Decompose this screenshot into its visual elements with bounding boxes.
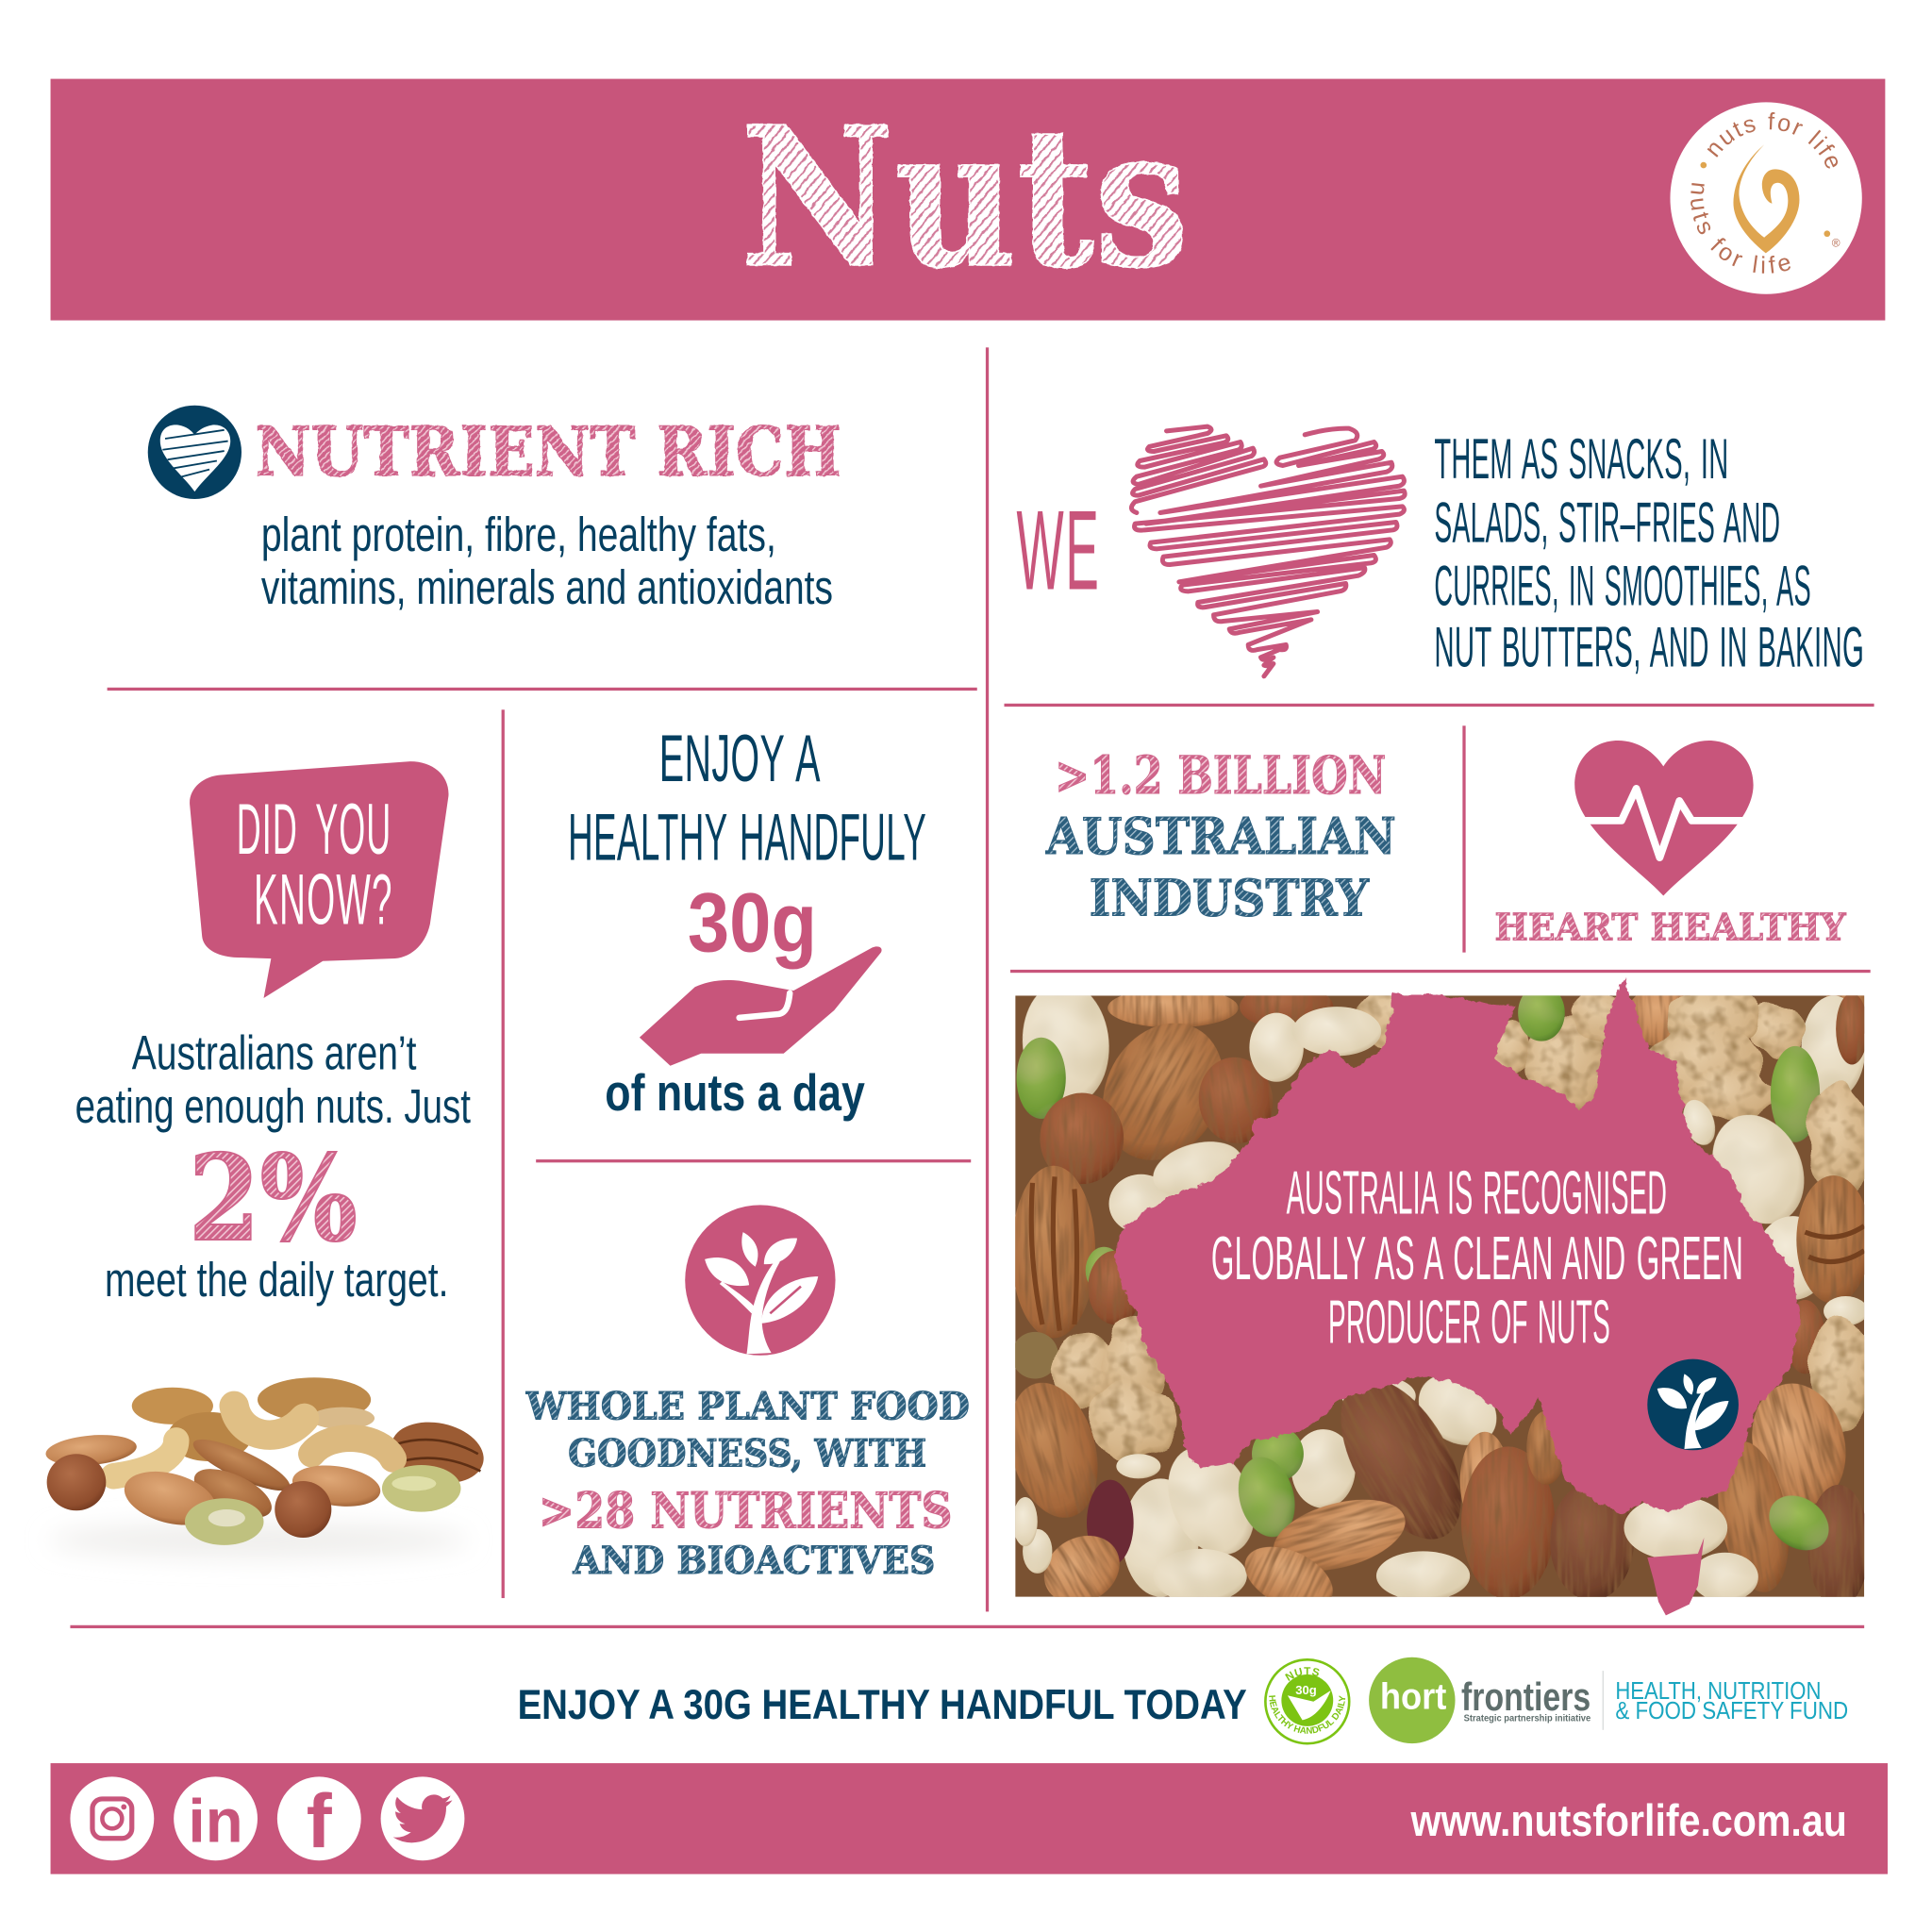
- logo: healthy handful badge: HEALTHY HANDFUL DAILY: [1269, 1695, 1345, 1734]
- logo: health nutrition fund: HEALTH, NUTRITION: [1615, 1676, 1821, 1705]
- panel: nutrient rich: [148, 406, 841, 614]
- serving label: of nuts a day: [605, 1063, 865, 1122]
- panel: billion industry: [1045, 744, 1396, 927]
- panel: billion industry: AUSTRALIAN: [1045, 807, 1396, 866]
- serving ideas text: [1434, 427, 1864, 679]
- logo: nuts for life: nuts for life: [1690, 183, 1790, 274]
- map: tasmania: [1647, 1538, 1704, 1615]
- map: australia: [1116, 979, 1800, 1514]
- icon: scribble heart: [1131, 426, 1405, 676]
- logo: hort frontiers: hort: [1380, 1677, 1446, 1718]
- panel: did you know: [75, 761, 471, 1307]
- statistic text: [75, 1026, 471, 1307]
- heading: nutrient rich: NUTRIENT RICH: [255, 412, 841, 491]
- panel: we love: WE: [1017, 487, 1100, 613]
- statistic: 2%: 2%: [189, 1128, 358, 1268]
- logo: hort frontiers: Strategic partnership initiative: [1464, 1714, 1591, 1724]
- statistic text: meet the daily target.: [105, 1253, 448, 1307]
- panel: australia photo map: [995, 978, 1873, 1623]
- panel: whole plant food: [525, 1205, 970, 1583]
- amount: 30g: 30g: [688, 875, 817, 969]
- panel: heart healthy: [1494, 741, 1847, 950]
- label: heart healthy: HEART HEALTHY: [1494, 907, 1847, 950]
- statistic text: Australians aren’t: [132, 1026, 416, 1080]
- header banner: [51, 79, 1885, 321]
- speech bubble: KNOW?: [254, 860, 393, 941]
- logo: healthy handful badge: NUTS: [1285, 1667, 1319, 1681]
- logo: healthy handful badge: 30g: [1295, 1683, 1317, 1697]
- website url: www.nutsforlife.com.au: [1410, 1795, 1847, 1845]
- icon: facebook: [277, 1776, 361, 1864]
- whole plant food text: AND BIOACTIVES: [572, 1538, 935, 1583]
- speech bubble: [190, 761, 448, 998]
- icon: hand: [640, 946, 882, 1066]
- call to action: ENJOY A 30G HEALTHY HANDFUL TODAY: [518, 1682, 1247, 1728]
- statistic text: eating enough nuts. Just: [75, 1079, 471, 1133]
- image: pile of nuts: [44, 1377, 490, 1557]
- footer banner: [51, 1763, 1888, 1874]
- handful heading: [568, 721, 926, 874]
- logo: nuts for life: [1670, 102, 1862, 294]
- icon: plant badge: [1647, 1359, 1739, 1450]
- logo: hort frontiers: [1369, 1657, 1604, 1743]
- whole plant food text: [525, 1384, 970, 1583]
- icon: heart with pulse: [1574, 741, 1754, 896]
- logo: nuts for life: nuts for life: [1707, 112, 1838, 168]
- logo: nuts for life: ®: [1832, 237, 1840, 250]
- logo: health nutrition fund: & FOOD SAFETY FUND: [1615, 1696, 1848, 1724]
- speech bubble: DID YOU: [237, 790, 391, 870]
- icon: facebook: f: [307, 1779, 333, 1864]
- logo: healthy handful badge: [1264, 1658, 1351, 1745]
- photo: mixed nuts: [995, 978, 1873, 1623]
- divider lines: [70, 347, 1874, 1628]
- logo: health nutrition fund: [1615, 1676, 1848, 1724]
- map text: [1211, 1158, 1743, 1357]
- icon: heart badge: [148, 406, 242, 499]
- whole plant food text: >28 NUTRIENTS: [539, 1483, 953, 1541]
- whole plant food text: WHOLE PLANT FOOD: [525, 1384, 970, 1429]
- icon: linkedin: [174, 1776, 258, 1860]
- panel: healthy handful: [568, 721, 926, 1122]
- nutrient description: [261, 508, 833, 614]
- icon: plant circle: [685, 1205, 836, 1356]
- title: Nuts: [741, 86, 1189, 311]
- panel: we love: [1017, 426, 1864, 679]
- panel: billion industry: INDUSTRY: [1090, 868, 1370, 927]
- nutrient description: plant protein, fibre, healthy fats,: [261, 508, 776, 561]
- icon: linkedin: in: [189, 1787, 243, 1856]
- icon: twitter: [381, 1776, 464, 1860]
- handful heading: HEALTHY HANDFULY: [568, 800, 926, 874]
- whole plant food text: GOODNESS, WITH: [568, 1430, 926, 1475]
- panel: billion industry: >1.2 BILLION: [1055, 744, 1386, 806]
- logo: hort frontiers: frontiers: [1461, 1674, 1591, 1719]
- handful heading: ENJOY A: [659, 721, 821, 795]
- nutrient description: vitamins, minerals and antioxidants: [261, 560, 833, 614]
- icon: instagram: [70, 1776, 154, 1860]
